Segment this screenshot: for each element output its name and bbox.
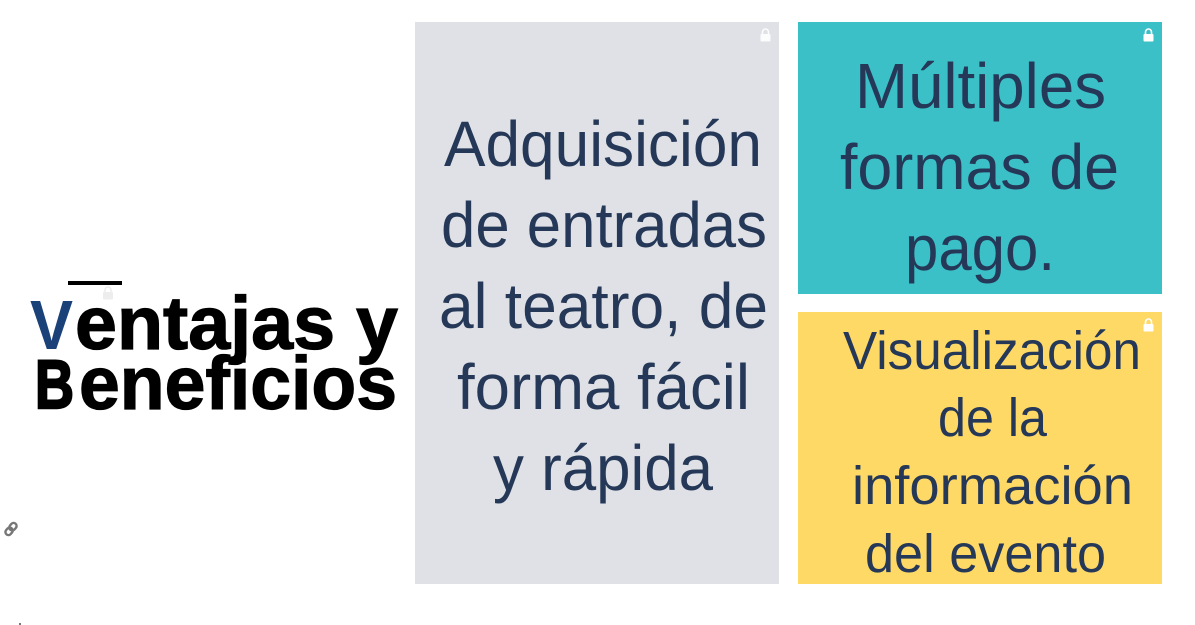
icon: lock bbox=[1144, 29, 1154, 42]
title: B bbox=[35, 346, 74, 423]
panel text: payment methods: Múltiples bbox=[855, 50, 1106, 122]
panel text: ticket purchase: y rápida bbox=[493, 432, 713, 504]
title: entajas y bbox=[75, 281, 398, 365]
panel text: ticket purchase: de entradas bbox=[441, 189, 767, 261]
panel text: ticket purchase: Adquisición bbox=[444, 108, 762, 180]
panel text: ticket purchase bbox=[439, 108, 768, 504]
panel text: ticket purchase: al teatro, de bbox=[439, 270, 768, 342]
panel text: event information bbox=[843, 321, 1141, 584]
icon: faint lock by title bbox=[103, 287, 113, 300]
panel: payment methods bbox=[798, 22, 1162, 294]
title: V bbox=[30, 286, 73, 364]
panel text: event information: de la bbox=[938, 388, 1048, 448]
title accent bar bbox=[68, 281, 122, 285]
icon: lock bbox=[1144, 319, 1154, 332]
icon: link bbox=[4, 522, 18, 536]
panel text: payment methods: pago. bbox=[905, 212, 1055, 284]
panel: event information bbox=[798, 312, 1162, 584]
icon: lock bbox=[760, 29, 770, 42]
panel text: payment methods bbox=[840, 50, 1119, 284]
title: eneficios bbox=[79, 341, 397, 425]
panel text: event information: del evento bbox=[865, 524, 1106, 584]
panel: ticket purchase bbox=[415, 22, 779, 584]
panel text: event information: información bbox=[852, 456, 1133, 516]
title bbox=[30, 281, 398, 425]
small dot bbox=[19, 623, 21, 625]
panel text: ticket purchase: forma fácil bbox=[457, 351, 750, 423]
panel text: event information: Visualización bbox=[843, 321, 1141, 381]
panel text: payment methods: formas de bbox=[840, 131, 1119, 203]
